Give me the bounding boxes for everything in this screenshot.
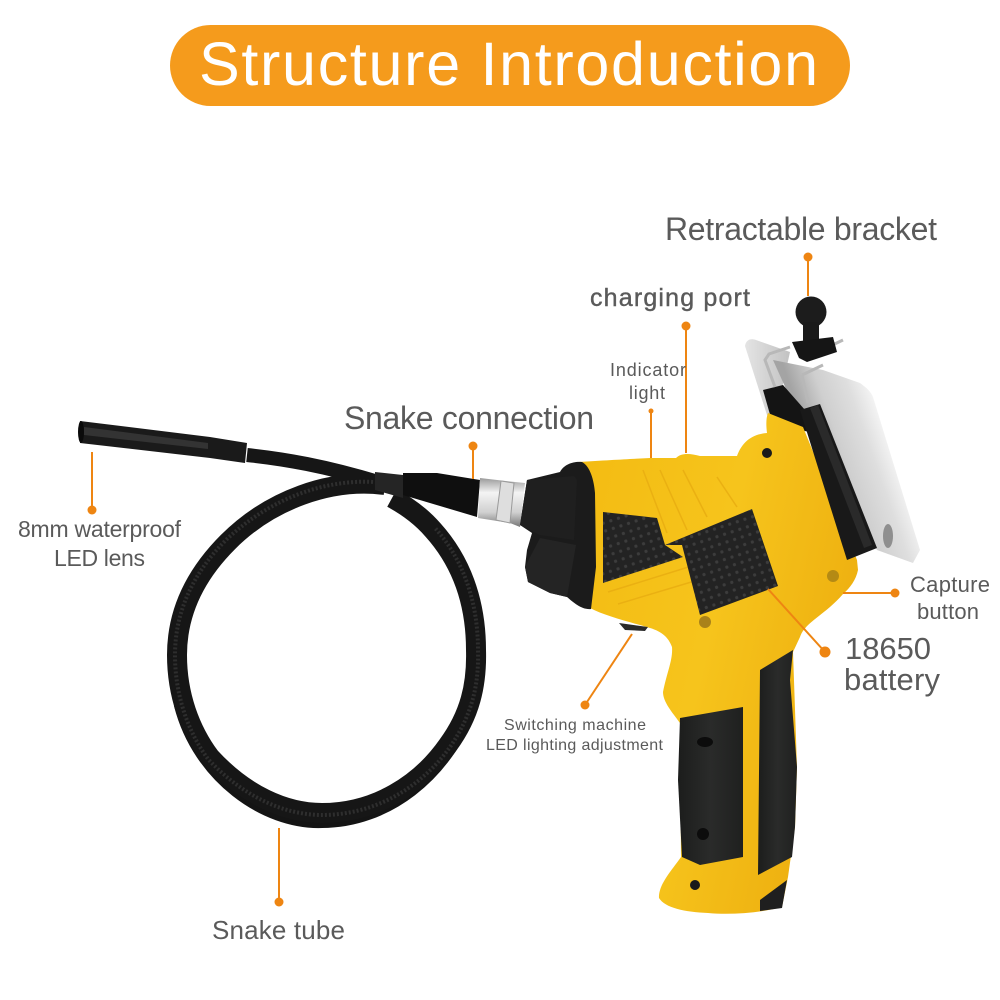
callout: indicator light bbox=[610, 360, 686, 458]
bracket clamp bbox=[765, 340, 877, 560]
callout: charging port bbox=[590, 284, 750, 453]
waterproof lens probe bbox=[78, 421, 247, 463]
callout: 18650 battery: 18650 bbox=[845, 631, 931, 666]
phone behind bracket bbox=[745, 339, 920, 563]
snake tube cable bbox=[175, 455, 478, 820]
callout: indicator light: Indicator bbox=[610, 360, 686, 380]
switching wheel bbox=[619, 623, 648, 631]
bracket black clip bbox=[763, 385, 810, 432]
callout: snake tube: Snake tube bbox=[212, 915, 345, 945]
body ridges bbox=[608, 470, 737, 604]
handle grip pad left bbox=[678, 707, 743, 865]
camera nose black housing bbox=[520, 462, 596, 609]
camera body yellow shell bbox=[578, 413, 858, 914]
retractable bracket knob bbox=[792, 296, 837, 362]
handle grip pad right bbox=[758, 650, 797, 875]
callout: indicator light: light bbox=[629, 383, 665, 403]
callout: capture button: Capture bbox=[910, 572, 990, 597]
handle base pad bbox=[760, 880, 787, 911]
callout: 18650 battery: battery bbox=[844, 662, 940, 697]
battery cover pad bbox=[665, 509, 778, 615]
callout: waterproof lens bbox=[18, 452, 182, 571]
callout: waterproof lens: 8mm waterproof bbox=[18, 516, 182, 542]
body screw holes bbox=[690, 448, 839, 890]
callout: snake connection bbox=[344, 400, 594, 479]
callout: switching machine: Switching machine bbox=[504, 717, 646, 734]
callout: waterproof lens: LED lens bbox=[54, 545, 145, 571]
callout: switching machine bbox=[486, 634, 664, 754]
callout: 18650 battery bbox=[768, 589, 940, 697]
callout: snake tube bbox=[212, 828, 345, 945]
callout: charging port: charging port bbox=[590, 284, 750, 312]
callout: capture button: button bbox=[917, 599, 979, 624]
callout: switching machine: LED lighting adjustment bbox=[486, 737, 664, 754]
snake connector bbox=[375, 472, 525, 527]
callout: retractable bracket bbox=[665, 211, 937, 296]
callout: capture button bbox=[843, 572, 990, 624]
callout: snake connection: Snake connection bbox=[344, 400, 594, 436]
title banner: Structure Introduction bbox=[199, 30, 818, 98]
rubber grip pad left bbox=[603, 512, 683, 583]
callout: retractable bracket: Retractable bracket bbox=[665, 211, 937, 247]
